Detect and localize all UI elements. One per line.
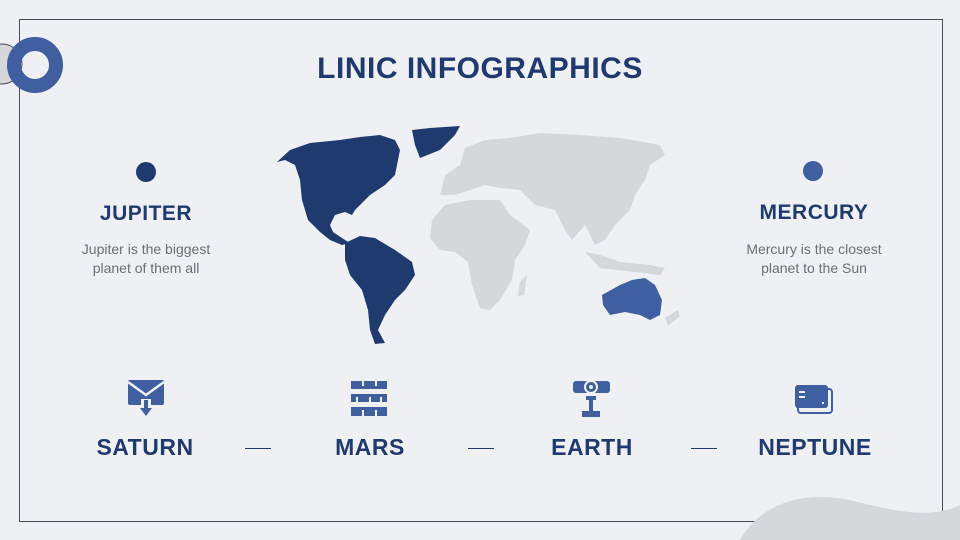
text: planet to the Sun [761, 260, 867, 276]
label: earth: EARTH [551, 434, 633, 460]
text [746, 241, 882, 276]
heading: MERCURY [760, 201, 868, 224]
text: Jupiter is the biggest [82, 241, 210, 257]
dot [803, 161, 823, 181]
panel: mercury [746, 161, 882, 276]
title: LINIC INFOGRAPHICS [317, 52, 643, 85]
text [82, 241, 210, 276]
icon: webcam [573, 381, 610, 417]
label: neptune: NEPTUNE [758, 434, 872, 460]
label: saturn: SATURN [96, 434, 194, 460]
dot [136, 162, 156, 182]
icon: mail [128, 380, 164, 416]
decoration: rings [0, 37, 63, 93]
heading: JUPITER [100, 202, 192, 225]
label: mars: MARS [335, 434, 405, 460]
panel: jupiter [82, 162, 210, 276]
text: planet of them all [93, 260, 199, 276]
text: Mercury is the closest [746, 241, 882, 257]
icon: brick wall [351, 381, 387, 416]
icon: card [795, 385, 833, 414]
